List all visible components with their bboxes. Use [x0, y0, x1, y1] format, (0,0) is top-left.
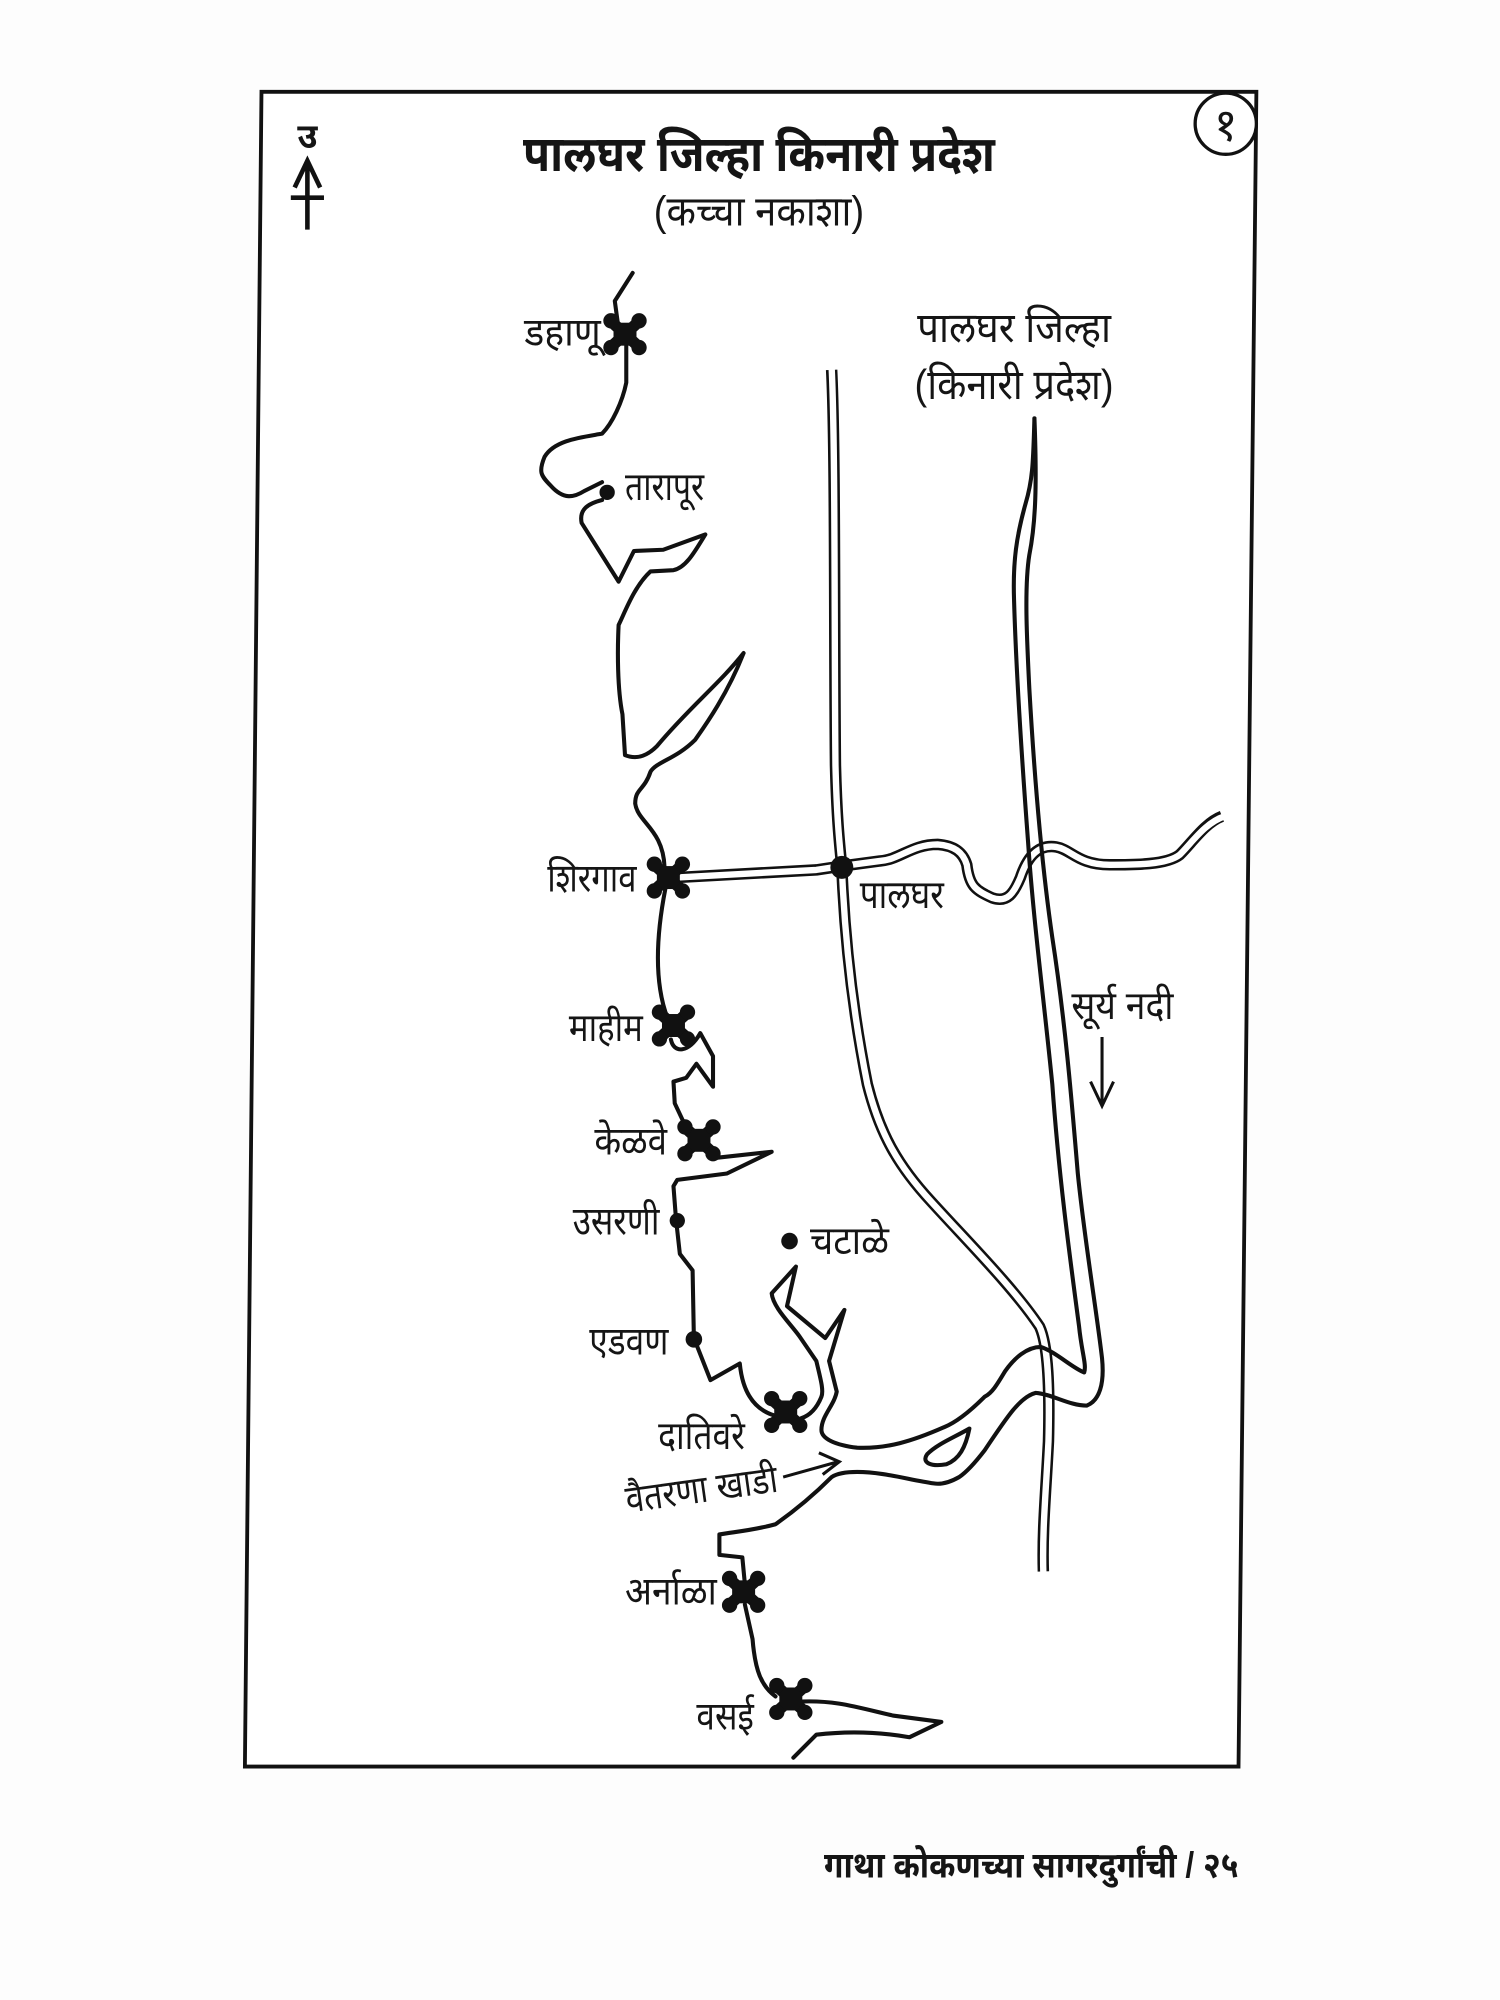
- place labels: वसई: [696, 1694, 755, 1739]
- place labels: एडवण: [589, 1320, 670, 1364]
- place dots: [599, 485, 853, 1348]
- arrow: river flow direction: [1091, 1037, 1114, 1106]
- coastline central: [658, 886, 776, 1416]
- icon: north compass arrow: उ: [297, 118, 318, 156]
- place labels: चटाळे: [810, 1218, 890, 1263]
- place labels: उसरणी: [573, 1199, 660, 1244]
- map number badge: [1195, 93, 1256, 154]
- creek island: [925, 1429, 969, 1465]
- coastline south: [745, 1605, 941, 1758]
- coastline north: [541, 273, 744, 867]
- label: Vaitarna creek with arrow: वैतरणा खाडी: [623, 1457, 781, 1522]
- region label: [915, 304, 1114, 408]
- place labels: [523, 311, 1174, 1739]
- region label: (किनारी प्रदेश): [915, 361, 1114, 408]
- footer caption: गाथा कोकणच्या सागरदुर्गांची / २५: [824, 1846, 1239, 1889]
- icon: north compass arrow: [291, 118, 324, 230]
- road: north-south double line: [832, 367, 1049, 1574]
- fort markers: [603, 313, 812, 1720]
- place labels: केळवे: [594, 1118, 668, 1163]
- place labels: अर्नाळा: [625, 1569, 718, 1614]
- place labels: दातिवरे: [658, 1413, 746, 1458]
- subtitle: (कच्चा नकाशा): [654, 188, 864, 235]
- road: Shirgaon to Palghar and east: [676, 816, 1224, 899]
- region label: पालघर जिल्हा: [917, 304, 1112, 351]
- place labels: पालघर: [860, 873, 945, 917]
- place labels: माहीम: [569, 1005, 644, 1050]
- title: पालघर जिल्हा किनारी प्रदेश: [523, 126, 996, 182]
- place labels: सूर्य नदी: [1071, 983, 1174, 1030]
- place labels: शिरगाव: [547, 856, 637, 901]
- map number badge: १: [1214, 98, 1238, 150]
- map frame: [245, 92, 1256, 1767]
- place labels: तारापूर: [625, 465, 705, 511]
- place labels: डहाणू: [523, 311, 606, 357]
- river: Surya and Vaitarna creek: [719, 418, 1103, 1584]
